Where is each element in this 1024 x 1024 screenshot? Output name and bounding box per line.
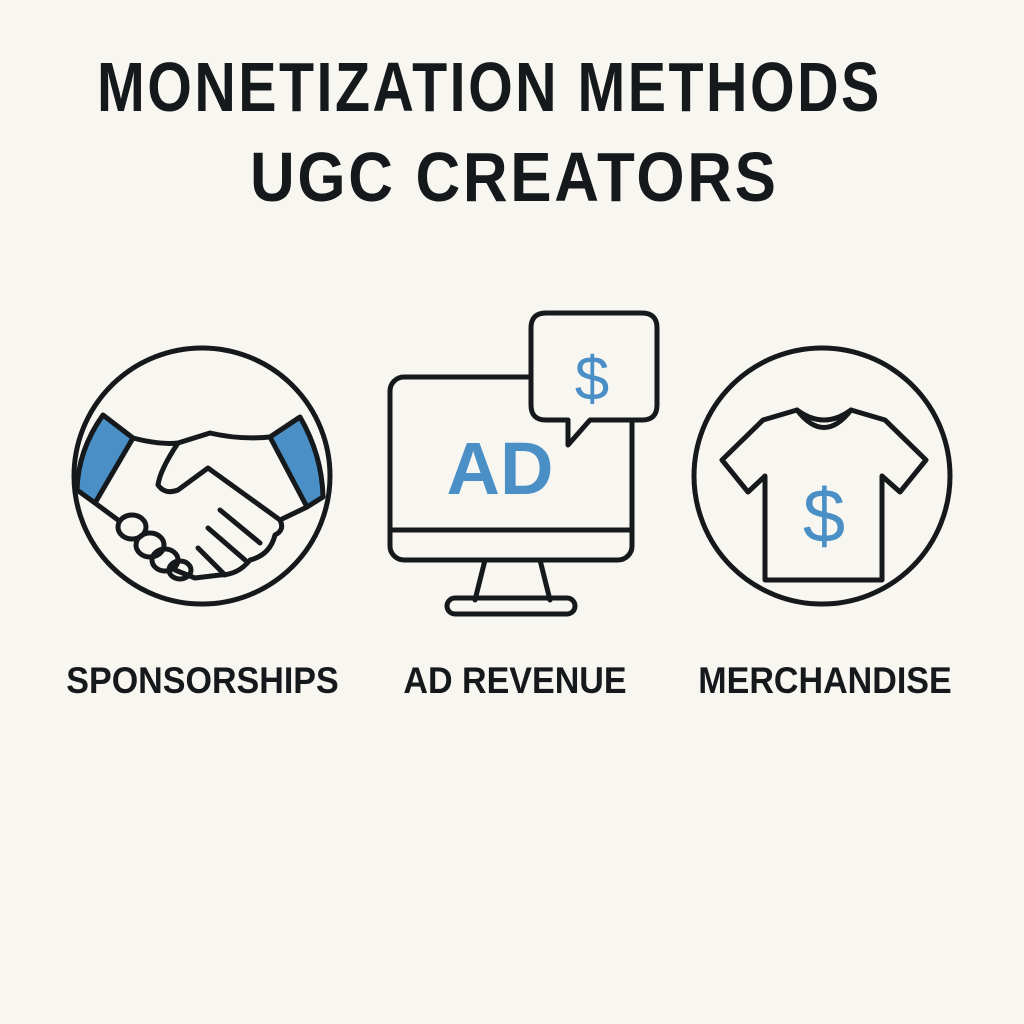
title: MONETIZATION METHODS <box>97 48 882 126</box>
title: UGC CREATORS <box>250 138 779 216</box>
icon: monitor with AD: $ <box>575 345 609 414</box>
icon: t-shirt: $ <box>803 474 845 559</box>
label: sponsorships: SPONSORSHIPS <box>66 660 339 701</box>
label: ad revenue: AD REVENUE <box>403 660 627 701</box>
icon: monitor with AD <box>390 313 657 614</box>
label: merchandise: MERCHANDISE <box>698 660 952 701</box>
icon: t-shirt <box>694 348 950 604</box>
title <box>97 48 882 216</box>
icon: handshake <box>74 348 330 604</box>
icon: monitor with AD: AD <box>447 427 553 510</box>
